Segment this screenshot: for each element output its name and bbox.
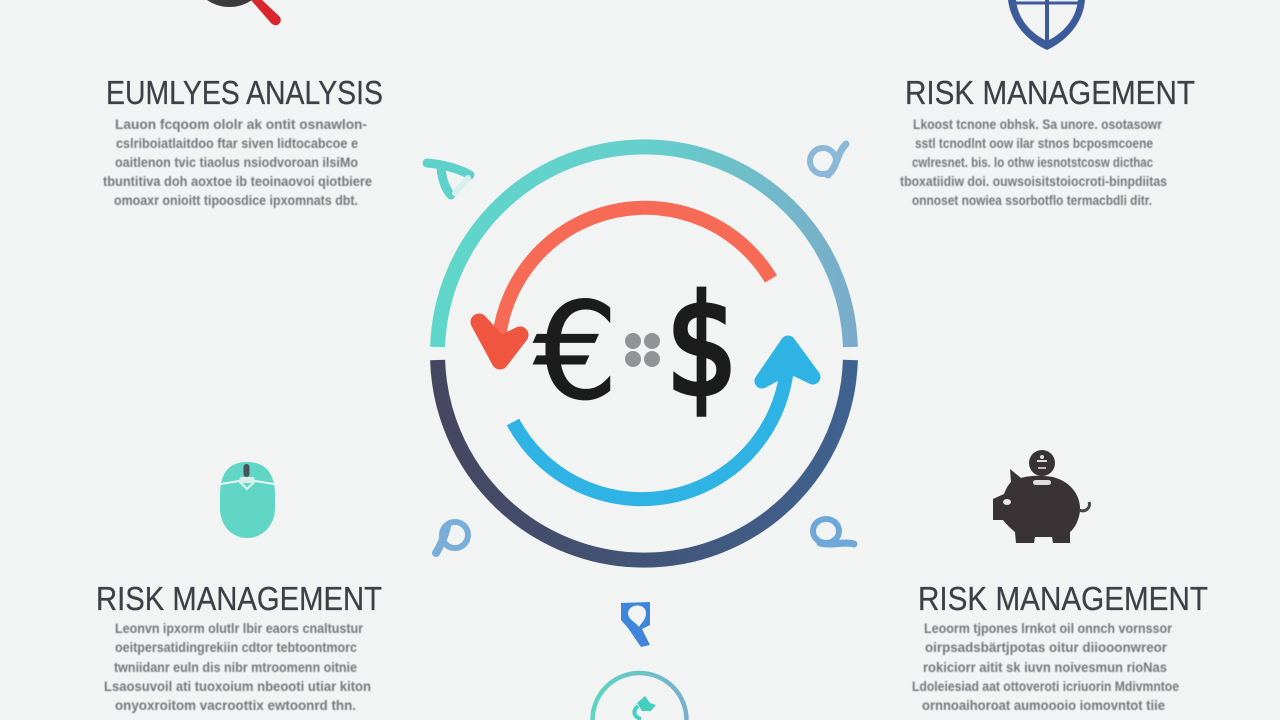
body text: top-left: omoaxr onioitt tipoosdice ipxomnats dbt.	[114, 192, 358, 208]
panel: top-left text	[103, 74, 383, 208]
small ring icon: bottom center	[592, 673, 686, 720]
icon: computer mouse	[220, 462, 275, 538]
body text: bottom-right: Leoorm tjpones lrnkot oil onnch vornssor	[924, 620, 1172, 636]
body text: bottom-left: onyoxroitom vacroottix ewtoonrd thn.	[115, 697, 356, 713]
pig tail	[1079, 502, 1089, 511]
body text: top-left: tbuntitiva doh aoxtoe ib teoinaovoi qiotbiere	[103, 173, 372, 189]
body text: top-right	[900, 116, 1167, 208]
small icon: bottom-right loop	[813, 519, 854, 544]
body text: bottom-left	[104, 620, 371, 713]
body text: top-right: Lkoost tcnone obhsk. Sa unore. osotasowr	[913, 116, 1162, 132]
pig eye	[1003, 499, 1011, 505]
body text: top-left: cslriboiatlaitdoo ftar siven lidtocabcoe e	[116, 135, 358, 151]
heading: top-left: EUMLYES ANALYSIS	[106, 74, 383, 111]
body text: top-left	[103, 116, 372, 208]
coin slot	[1033, 480, 1051, 485]
icon: magnifying glass	[207, 0, 281, 25]
euro symbol: €	[533, 274, 619, 430]
body text: bottom-left: twniidanr euln dis nibr mtroomenn oitnie	[114, 659, 357, 675]
body text: bottom-right	[912, 620, 1179, 713]
dollar symbol: $	[666, 266, 738, 427]
small icon: top-right loop	[810, 144, 846, 175]
small icon: top-left teal	[427, 163, 470, 195]
heading: top-right: RISK MANAGEMENT	[905, 74, 1195, 111]
body text: bottom-left: oeitpersatidingrekiin cdtor tebtoontmorc	[115, 639, 357, 655]
icon: piggy bank	[993, 450, 1089, 543]
small icon: bottom-left loop	[436, 522, 468, 553]
body text: top-right: cwlresnet. bis. lo othw iesnotstcosw dicthac	[912, 154, 1153, 170]
body text: top-right: onnoset nowiea ssorbotflo termacbdli ditr.	[912, 192, 1152, 208]
icon: shield	[1008, 0, 1085, 50]
body text: top-right: tboxatiidiw doi. ouwsoisitstoiocroti-binpdiitas	[900, 173, 1167, 189]
panel: bottom-left text	[96, 580, 382, 713]
body text: bottom-left: Leonvn ipxorm olutlr lbir eaors cnaltustur	[115, 620, 363, 636]
body text: bottom-right: rokiciorr aitit sk iuvn noivesmun rioNas	[923, 659, 1167, 675]
body text: top-left: oaitlenon tvic tiaolus nsiodvoroan ilsiMo	[115, 154, 358, 170]
arrow: blue clockwise	[513, 343, 813, 499]
body text: top-left: Lauon fcqoom ololr ak ontit osnawlon-	[115, 116, 367, 132]
body text: bottom-right: Ldoleiesiad aat ottoveroti icriuorin Mdivmntoe	[912, 678, 1179, 694]
body text: top-right: sstl tcnodlnt oow ilar stnos bcposmcoene	[915, 135, 1153, 151]
body text: bottom-right: ornnoaihoroat aumoooio iomovntot tiie	[922, 697, 1165, 713]
small ring inner arrow	[637, 696, 656, 711]
heading: bottom-left: RISK MANAGEMENT	[96, 580, 382, 617]
panel: top-right text	[900, 74, 1195, 208]
body text: bottom-right: oirpsadsbärtjpotas oitur diiooonwreor	[925, 639, 1168, 655]
arrow: red counter-clockwise	[479, 208, 771, 361]
body text: bottom-left: Lsaosuvoil ati tuoxoium nbeooti utiar kiton	[104, 678, 371, 694]
exchange dots	[625, 333, 660, 367]
small icon: bottom-center pin	[621, 602, 650, 647]
outer ring: top arc	[438, 147, 850, 347]
heading: bottom-right: RISK MANAGEMENT	[918, 580, 1208, 617]
coin	[1029, 450, 1055, 476]
pig body	[993, 469, 1080, 543]
central exchange diagram	[438, 147, 850, 560]
outer ring: bottom arc	[438, 360, 850, 560]
panel: bottom-right text	[912, 580, 1208, 713]
